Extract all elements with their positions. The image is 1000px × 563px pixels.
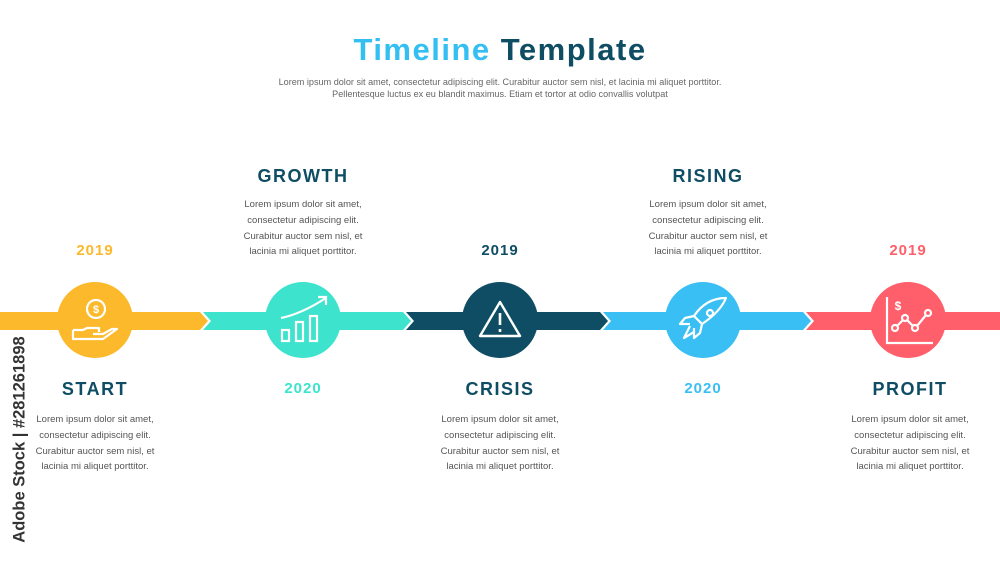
- text: 2020: [684, 380, 722, 397]
- text: consectetur adipiscing elit.: [652, 215, 764, 226]
- text: Lorem ipsum dolor sit amet,: [649, 199, 767, 210]
- text: lacinia mi aliquet porttitor.: [654, 246, 762, 257]
- icon: profit chart: [870, 282, 946, 358]
- text: 2019: [889, 242, 927, 259]
- text: consectetur adipiscing elit.: [247, 215, 359, 226]
- icon: profit chart: $: [895, 299, 902, 313]
- text: lacinia mi aliquet porttitor.: [249, 246, 357, 257]
- text: 2019: [76, 242, 114, 259]
- text: START: [62, 379, 128, 399]
- text: Lorem ipsum dolor sit amet,: [244, 199, 362, 210]
- text: 2020: [284, 380, 322, 397]
- icon: growth chart: [265, 282, 341, 358]
- text: Curabitur auctor sem nisl, et: [649, 231, 767, 242]
- text: Lorem ipsum dolor sit amet,: [851, 414, 969, 425]
- text: Curabitur auctor sem nisl, et: [441, 446, 559, 457]
- stage: growth: [244, 166, 362, 397]
- icon: hand with coin: $: [93, 304, 99, 316]
- icon: rocket: [665, 282, 741, 358]
- text: Curabitur auctor sem nisl, et: [244, 231, 362, 242]
- subtitle: Lorem ipsum dolor sit amet, consectetur adipiscing elit. Curabitur auctor sem nisl, et lacinia mi aliquet porttitor.: [279, 77, 721, 87]
- stage: profit: [851, 242, 970, 472]
- text: lacinia mi aliquet porttitor.: [446, 461, 554, 472]
- text: lacinia mi aliquet porttitor.: [856, 461, 964, 472]
- icon: warning: [462, 282, 538, 358]
- text: lacinia mi aliquet porttitor.: [41, 461, 149, 472]
- text: CRISIS: [465, 379, 534, 399]
- stage: crisis: [441, 242, 560, 472]
- text: RISING: [672, 166, 744, 186]
- text: consectetur adipiscing elit.: [854, 430, 966, 441]
- icon: hand with coin: [57, 282, 133, 358]
- watermark side text: Adobe Stock | #281261898: [10, 336, 28, 543]
- text: consectetur adipiscing elit.: [39, 430, 151, 441]
- text: Curabitur auctor sem nisl, et: [36, 446, 154, 457]
- text: consectetur adipiscing elit.: [444, 430, 556, 441]
- stage: start: [36, 242, 154, 472]
- text: Curabitur auctor sem nisl, et: [851, 446, 969, 457]
- subtitle: [279, 77, 721, 99]
- text: 2019: [481, 242, 519, 259]
- title: Timeline Template: [353, 32, 647, 67]
- text: Lorem ipsum dolor sit amet,: [36, 414, 154, 425]
- text: Lorem ipsum dolor sit amet,: [441, 414, 559, 425]
- text: PROFIT: [872, 379, 948, 399]
- stage: rising: [649, 166, 768, 397]
- text: GROWTH: [258, 166, 348, 186]
- subtitle: Pellentesque luctus ex eu blandit maximus. Etiam et tortor at odio convallis volutpat: [332, 89, 668, 99]
